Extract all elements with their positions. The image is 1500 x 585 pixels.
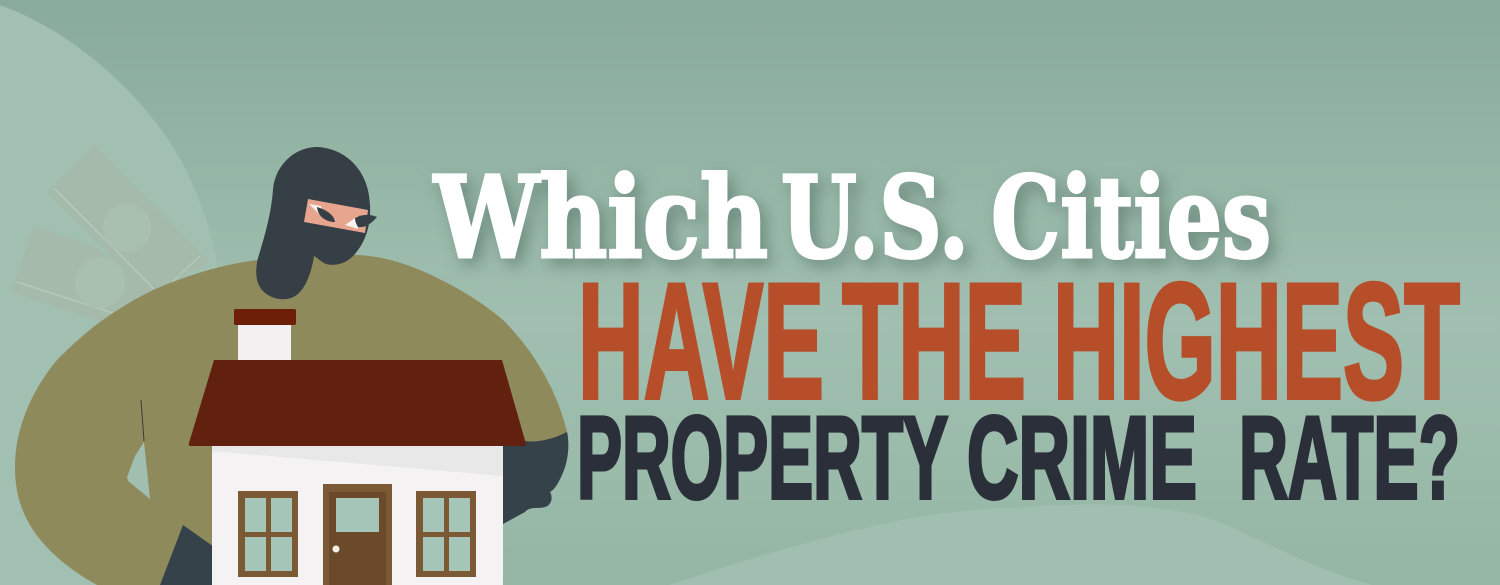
background hill: bottom	[669, 504, 1372, 585]
burglar	[15, 147, 568, 585]
door	[323, 484, 392, 585]
house	[189, 309, 526, 585]
arm crease	[141, 400, 144, 441]
window right	[416, 491, 476, 577]
icon: banknotes	[12, 145, 210, 322]
banknote back	[12, 225, 160, 322]
right eye pupil	[355, 215, 377, 227]
chimney	[234, 309, 296, 361]
title	[433, 153, 1460, 523]
burglar left hand	[160, 525, 262, 585]
title line 2: HAVE	[578, 249, 824, 433]
title line 2	[578, 249, 1460, 433]
title line 3: CRIME	[967, 392, 1197, 523]
eye opening	[304, 199, 368, 233]
right eye white	[345, 216, 358, 229]
title line 1: Cities	[991, 153, 1271, 284]
title line 1	[433, 153, 1271, 284]
burglar head	[256, 147, 377, 299]
left eye white	[309, 204, 325, 220]
banknote front	[46, 145, 210, 295]
title line 1: U.S.	[781, 153, 969, 284]
balaclava	[256, 147, 370, 299]
roof	[189, 360, 526, 446]
left eye pupil	[317, 207, 335, 222]
title line 1: Which	[433, 153, 768, 284]
title line 3: PROPERTY	[577, 392, 948, 523]
background curve: top left	[0, 5, 217, 585]
burglar body	[15, 255, 568, 585]
wall	[212, 445, 503, 585]
title line 2: THE	[842, 249, 1026, 433]
burglar right hand	[480, 432, 568, 524]
wall shadow	[212, 445, 503, 476]
window left	[238, 491, 298, 577]
arm gap	[127, 442, 150, 499]
